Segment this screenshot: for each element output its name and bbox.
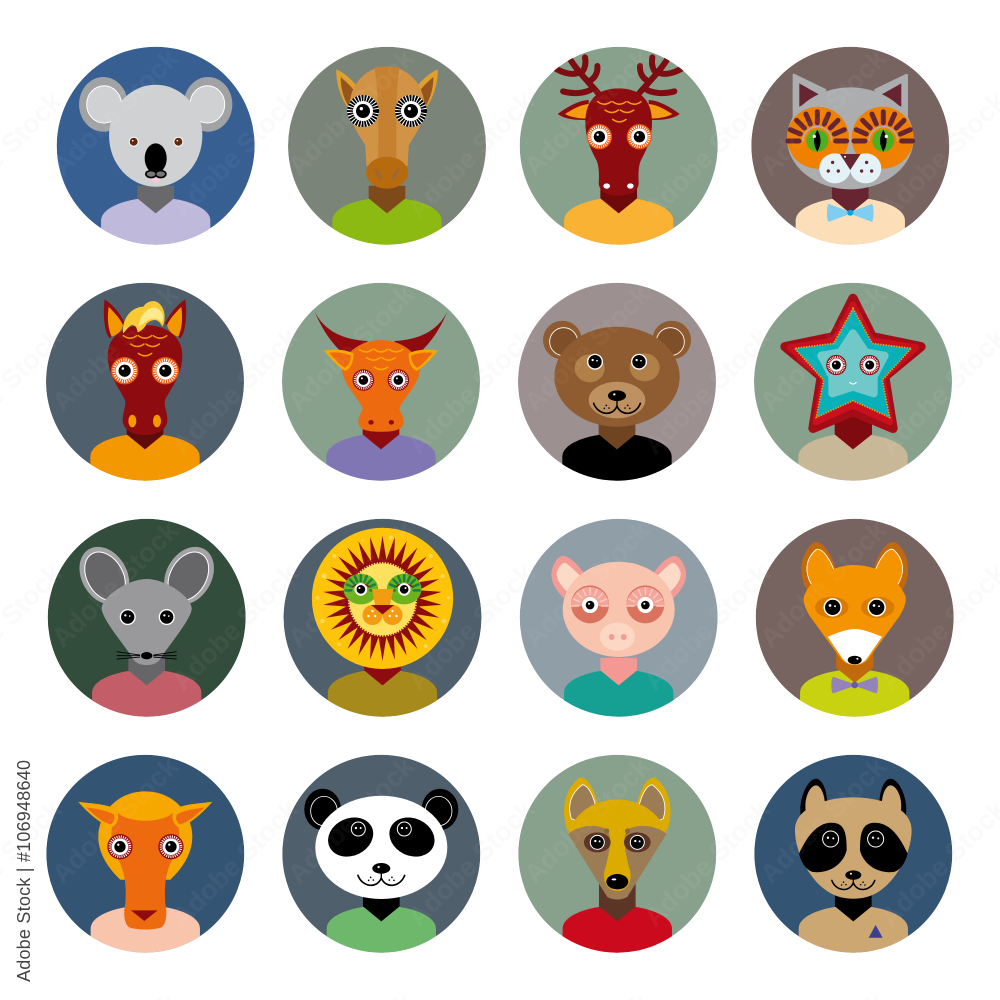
- avatar: fox: [756, 519, 954, 721]
- avatar: horse: [46, 283, 244, 485]
- avatar: panda: [282, 755, 480, 957]
- avatar: bull: [282, 283, 480, 485]
- avatar: raccoon: [754, 755, 952, 957]
- avatar: cat: [751, 47, 949, 249]
- avatar: mouse: [48, 519, 246, 721]
- stock id caption: Adobe Stock | #106948640: [14, 760, 34, 982]
- avatar: camel: [288, 47, 486, 249]
- avatar: koala: [57, 47, 255, 249]
- avatar: jackal: [518, 755, 716, 957]
- avatar: star: [754, 283, 952, 485]
- avatar: lion: [284, 519, 481, 721]
- avatar: bear: [518, 283, 716, 485]
- avatar: pig: [520, 519, 718, 721]
- avatar: deer: [520, 47, 718, 249]
- avatar: orange horse: [46, 755, 244, 957]
